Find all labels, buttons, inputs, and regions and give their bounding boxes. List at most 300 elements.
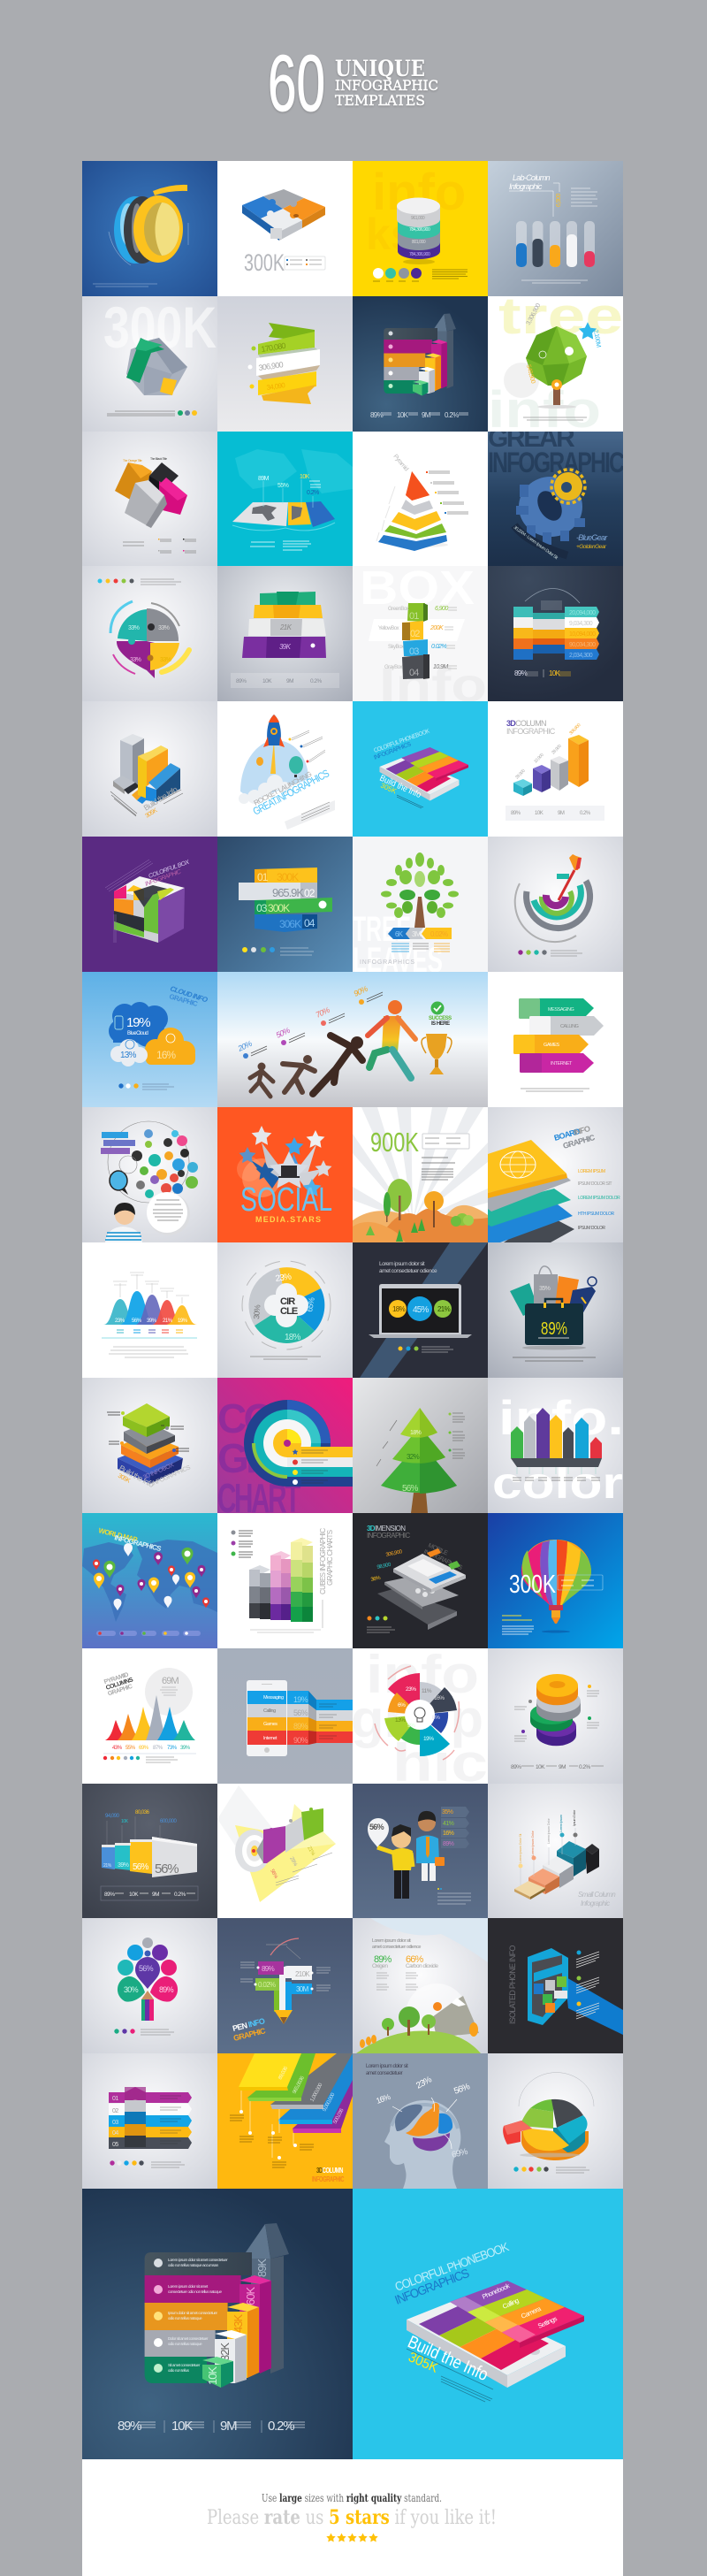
legend [232,1530,235,1556]
percent labels: 50% [275,1026,292,1040]
panel: small column [488,1784,623,1919]
heading: INFOGRAPHIC [367,1532,410,1540]
heading: GRAPHIC [107,1684,133,1697]
heading: COLORFUL BOX [148,860,191,880]
grey band: 965.9K [272,886,304,899]
panel: folded world map [217,432,353,566]
title: 60 unique infographic templates [268,44,438,119]
labels [123,457,167,462]
green band [255,898,332,914]
values: 23% [275,1272,293,1284]
dart [559,854,582,900]
green ring [530,1703,573,1731]
stats panel: 0.2% [580,811,591,816]
panel: yellow 3D column bars [217,2053,353,2189]
panel: magenta rainbow arcs [217,1378,353,1513]
menu labels: Calling [501,2297,520,2311]
success badge [429,1001,452,1027]
legend [242,947,275,952]
callouts: 69% [451,2147,469,2160]
windows: 56% [133,1862,149,1872]
heading [553,1124,597,1150]
ribbon label [153,185,187,195]
legend [118,1083,139,1089]
arrows: 35% [442,1809,453,1815]
labels: The Black Title [150,457,167,461]
heading [372,1938,421,1950]
grey column [120,734,144,790]
panel: blue sphere [82,161,217,296]
vertical labels: Ipsum Dolor [572,1809,576,1826]
panel: box stack [353,566,488,701]
legend [96,1631,201,1636]
yellow bar [239,2053,301,2091]
caption lines [93,223,188,287]
values: 18% [285,1333,301,1342]
panel: leaves tree: INFOGRAPHICS [360,959,415,966]
floating plate [450,2281,584,2348]
panel: cyan phone small: 305K [379,782,399,796]
percent labels: 70% [315,1005,331,1020]
arc text [515,883,576,942]
bars chart, half size [384,313,456,396]
legend [103,1756,140,1760]
pie slices [503,2099,589,2160]
callouts: 3,306,900 [526,302,542,326]
labels: 23% [115,1319,125,1324]
yellow step [254,605,323,618]
purple ring [536,1716,576,1746]
three arrows: 6K [395,930,404,938]
blue bar [278,2053,353,2124]
puzzle pie: 33% [128,625,140,631]
heading [103,1670,136,1697]
panel: 3D dimension dark: MOBILE [427,1542,449,1557]
values [112,1746,191,1751]
row text: odio non tellus natoque [168,2342,202,2346]
bands: 210K [295,1970,310,1978]
legend [518,950,547,955]
text: Build the Info [118,1464,156,1489]
panel: peaks [82,1648,217,1784]
stats box [101,1886,198,1900]
row numbers: 01 [112,2096,118,2102]
panel: cartoon people [353,1784,488,1919]
heading: ROCKET LAUNCHING [253,770,313,807]
heading: PEN INFO [232,2016,266,2033]
panel: purple colorful box [82,837,217,972]
values: 39% [180,1746,191,1751]
info rows [145,2252,252,2383]
orange box [115,462,152,504]
peaks [105,1695,195,1740]
circles [242,1158,281,1197]
heading: INFOGRAPHIC [506,727,556,736]
white column [543,1856,574,1888]
right arrows [565,607,599,660]
text: Build the Info [142,784,179,813]
phone: Messaging [263,1695,284,1701]
values: 89,036 [277,2065,290,2081]
top green ribbon [258,323,320,360]
balloons [256,756,303,777]
callouts: 56% [452,2082,471,2097]
orange layer [121,1434,179,1468]
grey box [125,480,167,528]
sphere [114,195,183,264]
word: unique: UNIQUE [335,56,425,81]
middle tier: 32% [407,1453,420,1461]
puzzle pieces [242,189,325,241]
white step [248,619,326,636]
blue band [565,1976,623,2035]
pale triangles [217,1785,279,1846]
panel: head brain [353,2053,488,2189]
panel: 300K cube [82,296,217,432]
panel: navy stepped bars [353,296,488,432]
heading: COLORFUL PHONEBOOK [393,2239,511,2294]
panel: yellow cylinder stack [353,161,488,296]
white row [109,2100,192,2115]
heading: 3DCOLUMN [506,719,546,728]
dark row [109,2136,192,2149]
values: 56% [139,1964,154,1973]
stats row: 10K [397,411,409,419]
text: INFOGRAPHICS [151,1464,192,1487]
phone [247,1680,287,1756]
runner 2 [283,1064,315,1092]
text: COLORFUL PHONEBOOK [373,728,430,754]
arrows: 41% [443,1821,454,1827]
top plate [393,1548,466,1593]
numbers: 02 [410,629,420,639]
panel: board layers [488,1107,623,1242]
right arrows: 20,094,000 [569,610,596,616]
heading: WORLD MAP [98,1526,139,1544]
values: 500,036 [332,2107,346,2125]
stats row: 9M [422,411,431,419]
white bar [215,2330,247,2383]
heading: amet consectetuer odience [379,1268,437,1274]
values: 98,900 [376,1563,392,1571]
pink arrow [520,1053,594,1073]
title: Infographic [581,1900,610,1907]
values: 65% [305,1296,316,1312]
panel: laptop [353,1242,488,1378]
labels: 19% [178,1319,188,1324]
blue band: 04 [304,917,315,929]
lower tier: 56% [402,1484,419,1494]
phone: Games [263,1722,277,1727]
lower steps [113,776,153,804]
caption [521,1089,589,1091]
row numbers [112,2096,118,2148]
vertical labels: Lorem Ipsum [559,1814,563,1832]
legend [513,2167,549,2172]
bands [255,1961,313,1994]
panel: target arrow [217,1784,353,1919]
stats box: 9M [152,1892,159,1898]
center clover [264,1283,308,1327]
values: 9% [407,1723,415,1729]
cylinder: 961,000 [411,216,425,221]
orange arrow [513,1035,589,1054]
callouts: 16% [375,2092,392,2106]
heading: INFOGRAPHIC [144,868,183,888]
panel: 3D dimension dark: INFOGRAPHICS [422,1548,463,1571]
blue band [255,914,317,932]
heading: 3DCOLUMN [316,2167,344,2175]
values right [430,606,448,670]
values: 69% [139,1746,149,1751]
curves [103,1291,197,1325]
grey layer [488,1166,571,1212]
background words [492,1390,624,1508]
rings [244,1400,331,1487]
test tubes [516,221,595,267]
values: 36% [370,1576,382,1583]
green band: 03 [256,902,268,914]
grey ring [536,1690,581,1721]
green bar [247,2053,315,2101]
values: 9,000,000 [322,2091,337,2113]
smoke [239,775,291,804]
colored runner [368,1000,415,1078]
grey bag [534,1266,558,1310]
stats: 9M [559,1764,566,1770]
panel: lab column [488,161,623,296]
panel: hot air balloon [488,1513,623,1648]
text: INFOGRAPHICS [373,741,413,761]
teal column [557,1841,586,1877]
values: 8% [432,1715,440,1721]
legend [110,2160,144,2166]
stats: 89% [511,1764,521,1770]
laptop [369,1284,472,1338]
panel: mountain landscape [353,1918,488,2053]
white banner [369,619,465,641]
top tier: 18% [410,1430,422,1436]
title: Small Column [578,1891,616,1899]
caption [250,1357,321,1359]
grey arrow: CALLING [560,1024,579,1029]
row text: Ipsum dolor sit amet consectetuer [168,2311,218,2315]
row text: Sit amet consectetuer [168,2363,201,2367]
values right: 6,900 [435,606,448,612]
callouts [521,1685,591,1733]
panel: large navy stepped bars [82,2189,353,2459]
stats panel: 89% [236,678,247,684]
center clover: CIR [280,1296,295,1307]
grey column [249,1565,270,1619]
callouts: 23% [414,2075,434,2091]
yellow ribbon: 34,090 [266,381,286,392]
values: 1,000,000 [309,2082,324,2103]
runner 3 [313,1036,362,1094]
heading: INFO [573,1124,591,1137]
green arrow: MESSAGING [548,1007,574,1013]
pink box [159,478,187,515]
circle [145,1668,193,1716]
arc labels [375,1666,459,1760]
stats panel [506,806,604,821]
values: 965,0036 [292,2075,306,2095]
stats panel: 10K [535,811,544,816]
heading [144,860,191,888]
white step: 21K [279,623,293,631]
callouts [525,302,602,385]
bands: 89% [262,1965,275,1973]
values: 87% [153,1746,163,1751]
panel: yellow cylinder stack: ks [366,210,415,259]
notes [576,1951,582,2006]
background words: gra p [353,1689,483,1748]
panel: browser windows [82,1784,217,1919]
stat labels: 89M [258,476,270,482]
rotated values [514,722,582,780]
legend list [429,471,468,514]
white bar: 32K [218,2343,232,2361]
panel: world map pins [82,1513,217,1648]
green cube [202,2357,233,2388]
right arrows: 90,034,300 [569,642,596,648]
person [105,1203,142,1242]
values [395,1686,445,1742]
text [373,728,430,761]
percent labels: 20% [236,1039,254,1053]
row text: Lorem ipsum dolor sit amet consectetuer [168,2258,228,2262]
row text: consectetuer odio non tellus natoque [168,2289,222,2294]
bubble [368,1818,389,1847]
baseline labels [102,1330,197,1338]
green step [260,592,315,605]
values: 43% [112,1746,123,1751]
success badge: IS HERE [431,1021,450,1027]
heading: Lorem ipsum dolor sit [366,2064,408,2069]
lower tier [381,1441,457,1494]
panel: runners wide [217,972,488,1107]
legend [398,1346,419,1351]
cubes [402,603,430,679]
gold gear [551,470,585,503]
percent labels: 90% [353,984,369,998]
stats box: 10K [129,1892,139,1898]
outer arcs [519,2073,594,2106]
panel: flower chart [82,1918,217,2053]
grey bar [270,2053,353,2109]
values: Carbon dioxide [406,1963,438,1969]
bands: 0.02% [258,1981,276,1989]
purple row [109,2087,192,2103]
left column [513,607,533,660]
callouts: 600,000 [160,1819,177,1824]
ring ticks [242,1261,331,1349]
blue band: 306K [279,918,301,930]
vertical heading: GRAPHIC CHARTS [326,1530,334,1586]
heading: INFOGRAPHICS [392,2266,471,2307]
values: Oxigen [372,1963,388,1969]
navy tag [567,1277,597,1320]
success badge: SUCCESS [429,1016,452,1021]
diagonal band [360,1242,488,1378]
blue cloud [109,1002,168,1047]
stats panel: 89% [511,811,521,816]
right arrows: 9,034,300 [569,621,593,627]
heading: amet consectetuer odience [372,1945,421,1950]
heading [98,1526,163,1553]
values right: 0.02% [431,644,446,650]
text: 305K [117,1473,132,1485]
white ribbon: 306,900 [258,360,284,372]
stat labels: 0.2% [307,490,319,496]
green band: 300K [268,902,290,914]
text [437,1893,471,1904]
trees [366,1179,474,1242]
bottom plate [377,1588,457,1630]
text lines [107,411,175,416]
blue panel [146,763,180,802]
orange bag [555,1276,579,1310]
rate line: Please rate us 5 stars if you like it! [207,2506,497,2529]
legend [114,2029,135,2034]
yellow number: 305K [406,2350,441,2376]
stats box: 0.2% [174,1892,186,1898]
lower menu strips [419,2302,549,2370]
caption [513,1357,596,1361]
panel: bell curves [82,1242,217,1378]
trees [360,2007,478,2048]
arc heading [525,588,580,603]
wheel [384,1673,457,1756]
values right: 10.9M [433,664,448,670]
runner 1 [250,1071,273,1097]
purple step [242,637,326,658]
stat labels: 10K [300,474,310,480]
circles: 45% [413,1305,430,1315]
thought outline [108,1121,189,1203]
row numbers: 03 [112,2120,118,2126]
panel: polygon tree [488,296,623,432]
target rings [527,881,590,929]
background words: color [492,1458,623,1508]
background words: info. [498,1390,623,1445]
dotted map background [235,449,353,493]
row text: odio non tellus natoque [168,2316,202,2320]
panel: iso columns [82,701,217,837]
panel: gear infographic: 30,2004 - Lorem Ipsum Dolor Sit [513,525,559,561]
panel: pencil chart [217,1918,353,2053]
stats [514,669,571,677]
base [511,1458,602,1467]
notes [571,188,597,206]
vertical heading: CUBES INFOGRAPHIC [319,1528,327,1594]
halo ring [392,2105,458,2129]
panel: ribbon banners [217,296,353,432]
lines [407,2349,493,2402]
values: 66% [406,1954,423,1965]
word: infographic: INFOGRAPHIC [335,77,438,94]
circles: 21% [437,1305,451,1313]
cylinder: 784,306,900 [409,227,430,233]
vertical heading: ISOLATED PHONE INFO [508,1945,517,2024]
legend dots [373,268,422,279]
briefcase: 89% [541,1319,567,1339]
three arrows [388,928,452,939]
middle tier [392,1426,445,1464]
legend box [285,256,325,270]
heading: PYRAMID [103,1672,130,1685]
tag teal [510,1283,538,1316]
